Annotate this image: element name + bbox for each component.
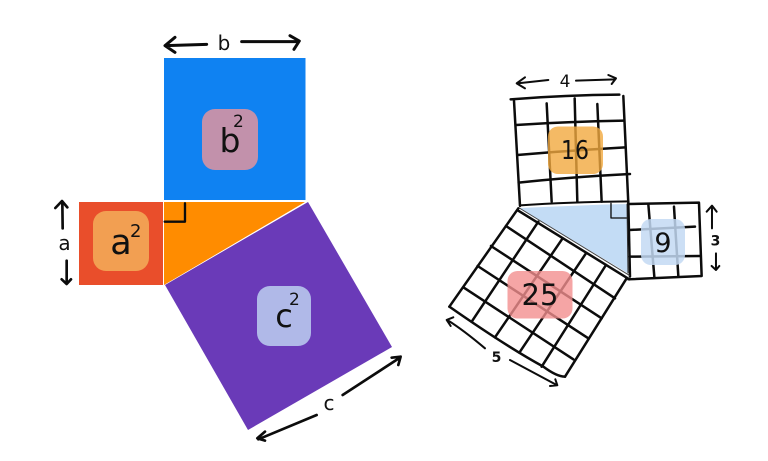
dimension: c [257, 357, 401, 441]
right triangle [164, 202, 305, 285]
dimension: 3 [707, 206, 720, 270]
square: c squared: c [275, 297, 293, 335]
dimension: 4: 4 [560, 72, 570, 92]
grid square: 25 [449, 208, 629, 377]
label: 16: 16 [561, 136, 589, 166]
square: a squared: a [110, 223, 132, 263]
label: 9 [641, 219, 685, 265]
dimension: b: b [218, 31, 230, 55]
dimension: a: a [58, 231, 71, 255]
dimension: 3: 3 [711, 234, 720, 250]
square: a squared: 2 [130, 221, 141, 242]
dimension: a [55, 201, 71, 284]
right angle mark [165, 203, 185, 222]
square: b squared: 2 [233, 112, 244, 132]
dimension: 4 [517, 72, 616, 92]
diagram: coloured Pythagorean squares [55, 31, 401, 441]
dimension: 5: 5 [492, 350, 501, 366]
square: b squared: b [220, 121, 240, 160]
grid square: 16 [511, 95, 630, 277]
label: 25 [508, 271, 572, 318]
triangle with sides 3, 4, 5 [519, 201, 629, 273]
diagram: hand-drawn 3-4-5 grid squares [447, 72, 720, 386]
square: c squared [165, 202, 392, 430]
grid square: 9 [628, 203, 702, 279]
label: 25: 25 [522, 278, 558, 312]
label: 16 [548, 126, 603, 174]
square: b squared [164, 58, 306, 200]
label: 9: 9 [654, 228, 672, 259]
square: c squared: 2 [289, 290, 300, 310]
dimension: b [165, 31, 299, 55]
dimension: 5 [447, 317, 557, 386]
square: a squared [79, 202, 163, 285]
dimension: c: c [324, 391, 334, 415]
